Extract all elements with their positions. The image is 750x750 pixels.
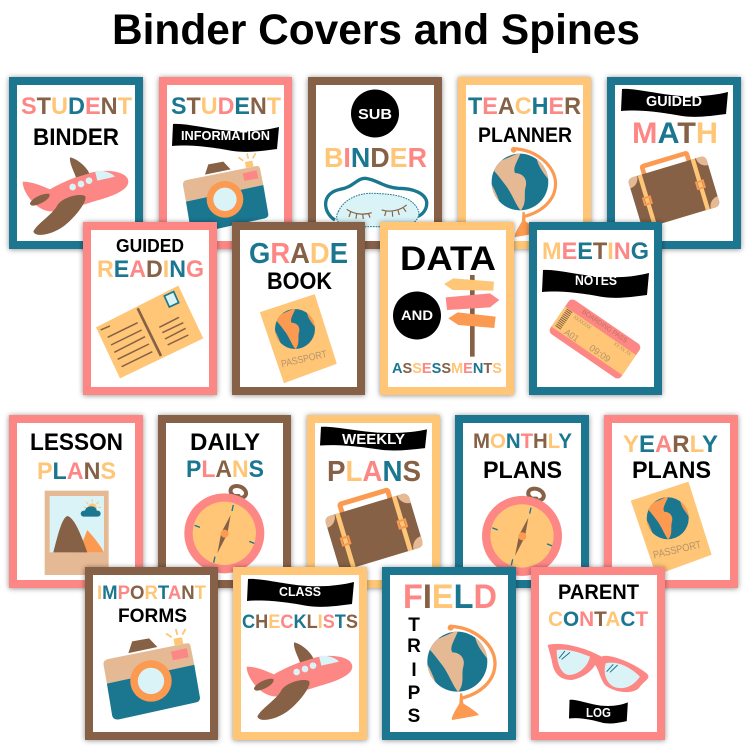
heading: plans: PLANS [37,458,116,485]
panel: class checklists cover [233,567,367,740]
panel: meeting notes cover [529,222,662,395]
heading: planner: PLANNER [478,124,572,147]
banner label: WEEKLY [342,431,405,448]
icon: glasses [548,644,648,692]
badge: sub [351,90,399,138]
heading: trips (vertical): S [408,706,420,727]
banner: guided [621,89,728,117]
heading: book: BOOK [267,268,333,295]
icon: postcard [96,286,203,378]
panel: grade book cover [232,222,365,395]
banner label: GUIDED [646,93,702,110]
panel: sub binder cover [308,77,442,249]
heading: important: IMPORTANT [97,583,206,604]
heading: field: FIELD [403,578,497,616]
heading: plans: PLANS [327,456,421,488]
heading: reading: READING [97,256,204,283]
icon: boarding pass: 09:09 [587,343,612,364]
banner: notes [542,270,649,298]
icon: signpost [444,275,499,357]
heading: teacher: TEACHER [468,93,581,120]
icon: passport: PASSPORT [280,349,328,370]
title: Binder Covers and Spines [112,6,640,54]
icon: compass [184,484,264,573]
banner label: INFORMATION [181,128,270,143]
panel: important forms cover [85,567,218,740]
icon: camera [103,629,200,719]
icon: boarding pass: XX XX XX [612,341,632,358]
panel: daily plans cover [158,415,291,588]
icon: camera [183,153,268,233]
panel: student binder cover [9,77,143,249]
icon: passport: PASSPORT [652,539,703,561]
heading: math: MATH [632,117,718,150]
banner: class [247,579,354,607]
heading: meeting: MEETING [542,238,649,265]
heading: plans: PLANS [483,457,562,484]
banner: information [172,124,279,152]
panel: student information cover [159,77,292,249]
icon: passport [261,295,336,382]
heading: plans: PLANS [632,457,711,484]
heading: data: DATA [400,240,496,278]
panel: lesson plans cover [9,415,143,588]
badge: and [393,292,441,340]
heading: trips (vertical): I [411,660,417,681]
heading: trips (vertical): P [408,683,421,704]
panel: weekly plans cover [307,415,440,588]
heading: monthly: MONTHLY [473,430,572,453]
panel: teacher planner cover [458,77,591,249]
heading: grade: GRADE [249,238,348,270]
heading: yearly: YEARLY [623,431,718,458]
panel: data and assessments cover [380,222,514,395]
panel: guided math cover [607,77,741,249]
panel: guided reading cover [83,222,217,395]
heading: student: STUDENT [171,93,281,120]
banner label: CLASS [279,584,321,599]
icon: compass [482,487,562,576]
heading: assessments: ASSESSMENTS [392,360,502,377]
icon: globe [425,625,495,720]
icon: suitcase [311,479,437,585]
icon: boarding pass [548,298,642,380]
banner: weekly [320,427,427,451]
icon: boarding pass: A01 [562,327,581,344]
heading: lesson: LESSON [30,429,123,456]
icon: landscape photo [45,491,109,575]
icon: airplane [23,157,128,235]
heading: plans: PLANS [186,456,264,483]
panel: monthly plans cover [455,415,589,588]
icon: airplane [247,642,352,720]
heading: trips (vertical): R [407,636,421,657]
badge label: AND [401,307,433,323]
heading: parent: PARENT [558,581,639,604]
heading: trips (vertical): T [408,615,420,636]
banner: log [569,700,628,724]
icon: boarding pass: BOARDING PASS [580,309,629,345]
icon: boarding pass: XXXXXXX [572,315,593,331]
icon: passport [632,483,711,574]
banner label: LOG [586,705,611,720]
heading: forms: FORMS [118,606,187,627]
panel: yearly plans cover [604,415,738,588]
icon: suitcase [615,143,733,242]
panel: parent contact log cover [531,567,665,740]
heading: binder: BINDER [33,124,119,151]
panel: field trips cover [382,567,516,740]
badge label: SUB [358,106,392,123]
heading: guided: GUIDED [116,236,184,256]
heading: binder: BINDER [324,142,427,173]
heading: daily: DAILY [190,429,260,456]
icon: sleep mask [326,178,427,227]
heading: contact: CONTACT [548,608,648,631]
heading: student: STUDENT [21,93,132,120]
banner label: NOTES [575,272,617,288]
heading: checklists: CHECKLISTS [242,612,358,633]
icon: globe [489,147,556,237]
